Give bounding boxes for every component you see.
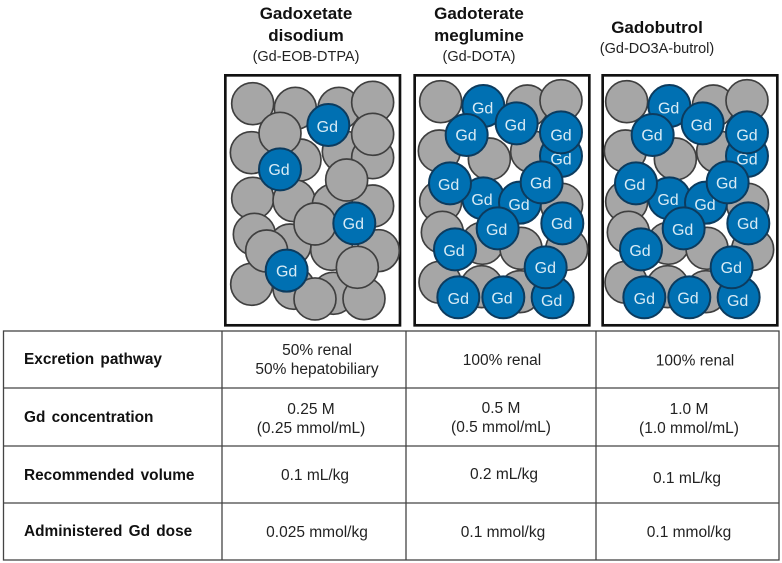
panel: Gadobutrol molecules: Gd	[658, 100, 679, 117]
panel: Gadobutrol molecules: Gd	[641, 128, 663, 145]
panel: Gadoterate meglumine molecules: Gd	[550, 127, 572, 144]
row: Excretion pathway: 50% hepatobiliary	[255, 361, 379, 378]
panel: Gadobutrol molecules: Gd	[736, 151, 758, 168]
row: Recommended volume	[24, 466, 721, 487]
panel: Gadoterate meglumine molecules: Gd	[472, 100, 493, 117]
panel: Gadobutrol molecules: Gd	[691, 117, 712, 134]
panel: Gadobutrol molecules: Gd	[624, 177, 645, 194]
panel: Gadobutrol molecules: Gd	[634, 291, 655, 308]
comparison table	[4, 331, 779, 560]
panel: Gadobutrol molecules: Gd	[727, 293, 748, 310]
panel: Gadobutrol molecules	[603, 75, 777, 325]
panel: Gadobutrol molecules: Gd	[737, 216, 758, 233]
panel: Gadobutrol molecules: Gd	[629, 243, 651, 260]
heading: Gadoxetate disodium	[253, 4, 359, 65]
heading: Gadoterate meglumine	[434, 4, 524, 65]
row: Administered Gd dose: Administered Gd dose	[24, 523, 193, 540]
panel: Gadobutrol molecules: Gd	[672, 222, 693, 239]
heading: Gadobutrol: Gadobutrol	[611, 18, 703, 37]
panel: Gadoterate meglumine molecules: Gd	[530, 175, 551, 192]
panel: Gadobutrol molecules: Gd	[677, 290, 699, 307]
row: Excretion pathway: Excretion pathway	[24, 351, 162, 368]
row: Excretion pathway: 100% renal	[463, 352, 541, 369]
panel: Gadoterate meglumine molecules: Gd	[508, 197, 530, 214]
row: Gd concentration: 1.0 M	[670, 401, 708, 418]
row: Excretion pathway: 100% renal	[656, 352, 734, 370]
row: Excretion pathway: 50% renal	[282, 342, 352, 359]
panel: Gadobutrol molecules: Gd	[721, 260, 742, 277]
panel: Gadobutrol molecules: Gd	[736, 127, 758, 144]
panel: Gadoterate meglumine molecules: Gd	[541, 293, 562, 310]
panel: Gadoterate meglumine molecules: Gd	[551, 216, 572, 233]
panel: Gadoterate meglumine molecules: Gd	[438, 177, 459, 194]
row: Gd concentration: (1.0 mmol/mL)	[639, 420, 739, 437]
panel: Gadoterate meglumine molecules: Gd	[535, 260, 556, 277]
heading: Gadoxetate disodium: disodium	[268, 26, 344, 45]
panel: Gadoterate meglumine molecules	[415, 75, 589, 325]
row: Gd concentration: (0.25 mmol/mL)	[257, 420, 365, 437]
row: Gd concentration: (0.5 mmol/mL)	[451, 419, 551, 436]
row: Administered Gd dose: 0.025 mmol/kg	[266, 524, 368, 541]
panel: Gadobutrol molecules: Gd	[716, 175, 737, 192]
heading: Gadoterate meglumine: Gadoterate	[434, 4, 524, 23]
heading: Gadobutrol	[600, 18, 714, 57]
panel: Gadobutrol molecules: Gd	[657, 192, 679, 209]
row: Gd concentration: Gd concentration	[24, 409, 153, 426]
row: Administered Gd dose: 0.1 mmol/kg	[461, 524, 545, 541]
heading: Gadoxetate disodium: Gadoxetate	[260, 4, 352, 23]
panel: Gadoterate meglumine molecules: Gd	[486, 222, 507, 239]
row: Gd concentration: 0.25 M	[287, 401, 335, 418]
row: Gd concentration	[24, 400, 739, 437]
heading: Gadoxetate disodium: (Gd-EOB-DTPA)	[253, 49, 359, 65]
heading: Gadoterate meglumine: (Gd-DOTA)	[442, 49, 516, 65]
row: Recommended volume: 0.1 mL/kg	[653, 470, 721, 487]
row: Excretion pathway	[24, 342, 734, 378]
panel: Gadoterate meglumine molecules: Gd	[505, 117, 526, 134]
panel: Gadoterate meglumine molecules: Gd	[471, 192, 493, 209]
panel: Gadoterate meglumine molecules: Gd	[448, 291, 469, 308]
panel: Gadoterate meglumine molecules: Gd	[443, 243, 465, 260]
panel: Gadoxetate disodium molecules: Gd	[276, 264, 297, 281]
panel: Gadoxetate disodium molecules	[225, 75, 400, 325]
row: Recommended volume: Recommended volume	[24, 467, 195, 484]
panel: Gadoterate meglumine molecules: Gd	[491, 290, 513, 307]
heading: Gadobutrol: (Gd-DO3A-butrol)	[600, 41, 714, 57]
heading: Gadoterate meglumine: meglumine	[434, 26, 524, 45]
panel: Gadoxetate disodium molecules: Gd	[268, 162, 290, 179]
panel: Gadoxetate disodium molecules: Gd	[343, 216, 364, 233]
row: Recommended volume: 0.2 mL/kg	[470, 466, 538, 483]
panel: Gadoterate meglumine molecules: Gd	[550, 151, 572, 168]
panel: Gadoterate meglumine molecules: Gd	[455, 128, 477, 145]
row: Administered Gd dose: 0.1 mmol/kg	[647, 524, 731, 541]
panel: Gadobutrol molecules: Gd	[694, 197, 716, 214]
panel: Gadoxetate disodium molecules: Gd	[317, 119, 338, 136]
row: Administered Gd dose	[24, 523, 731, 541]
row: Gd concentration: 0.5 M	[482, 400, 520, 417]
row: Recommended volume: 0.1 mL/kg	[281, 467, 349, 484]
